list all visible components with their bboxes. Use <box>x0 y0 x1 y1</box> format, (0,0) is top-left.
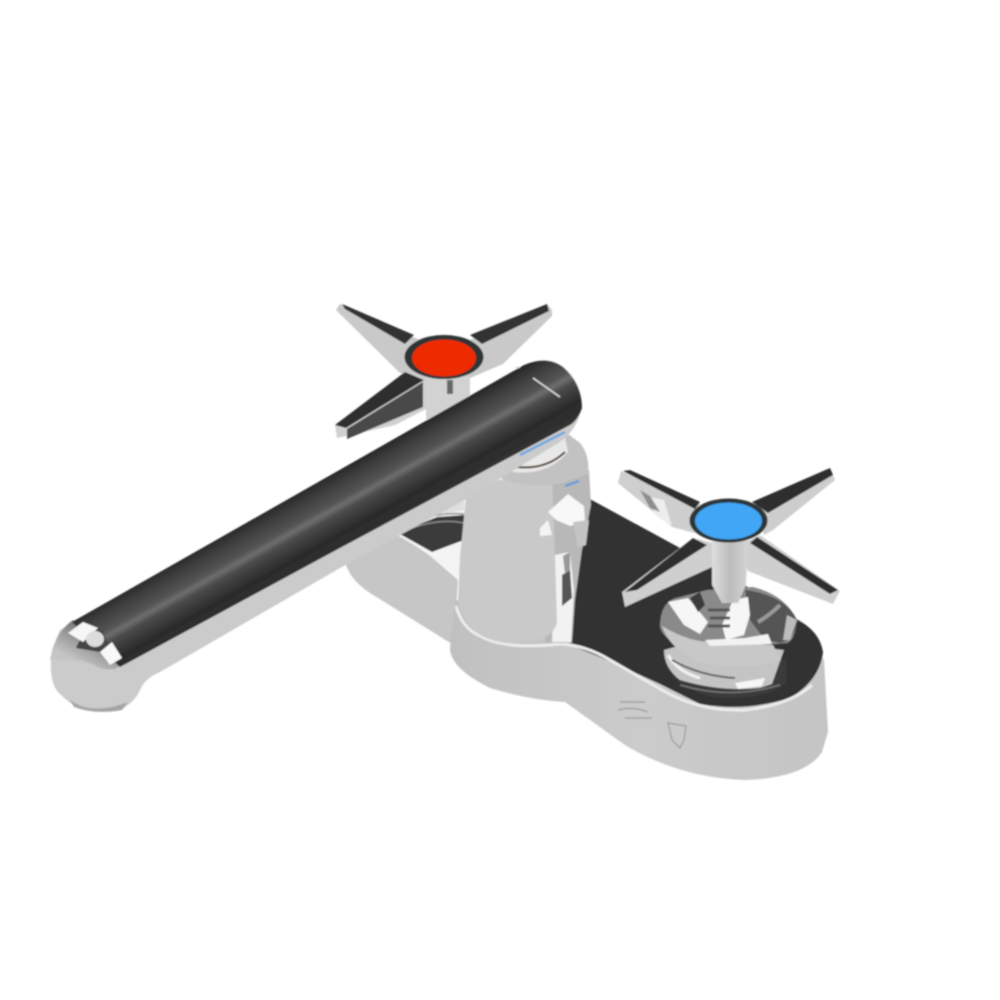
valve thread band <box>670 660 787 698</box>
base left lobe <box>345 525 458 644</box>
valve bulb chrome <box>660 587 797 650</box>
cold indicator blue <box>695 502 762 540</box>
cold handle front-left arm <box>622 538 722 607</box>
base main side <box>450 600 828 780</box>
cold water valve <box>660 587 797 698</box>
base logo marks <box>618 702 686 748</box>
hot handle stem <box>426 376 470 420</box>
valve lower ring <box>664 640 784 689</box>
hot handle lower arm <box>335 373 428 438</box>
spout end highlights <box>515 367 560 397</box>
cold water cross handle <box>618 468 840 607</box>
central faucet column <box>458 470 591 643</box>
hot water cross handle <box>335 304 552 439</box>
spout tip chrome <box>76 630 116 662</box>
column white highlights <box>548 494 585 526</box>
deck plate base <box>345 495 828 780</box>
hot handle silver arms <box>336 304 552 378</box>
valve bulb light band <box>662 626 781 667</box>
hot valve chrome wedge <box>393 495 466 580</box>
spout tip shaded dome <box>50 620 122 669</box>
base top dark face <box>570 498 823 707</box>
spout dark tube <box>72 361 582 667</box>
cold handle front-right arm <box>738 535 840 604</box>
column collar under spout <box>500 434 588 486</box>
hot handle cap ring <box>404 335 484 379</box>
base top bright rim <box>456 606 812 710</box>
hot indicator red <box>412 340 476 376</box>
cold handle back-right arm <box>752 468 835 535</box>
cold handle stem <box>712 540 748 603</box>
column silver body <box>458 470 557 643</box>
swivel spout <box>50 361 582 712</box>
cold handle cap ring <box>690 498 768 542</box>
spout silver underside <box>51 365 582 710</box>
spout aerator <box>70 700 128 712</box>
column chrome right side <box>545 470 591 643</box>
cold handle back-left arm <box>618 471 702 535</box>
